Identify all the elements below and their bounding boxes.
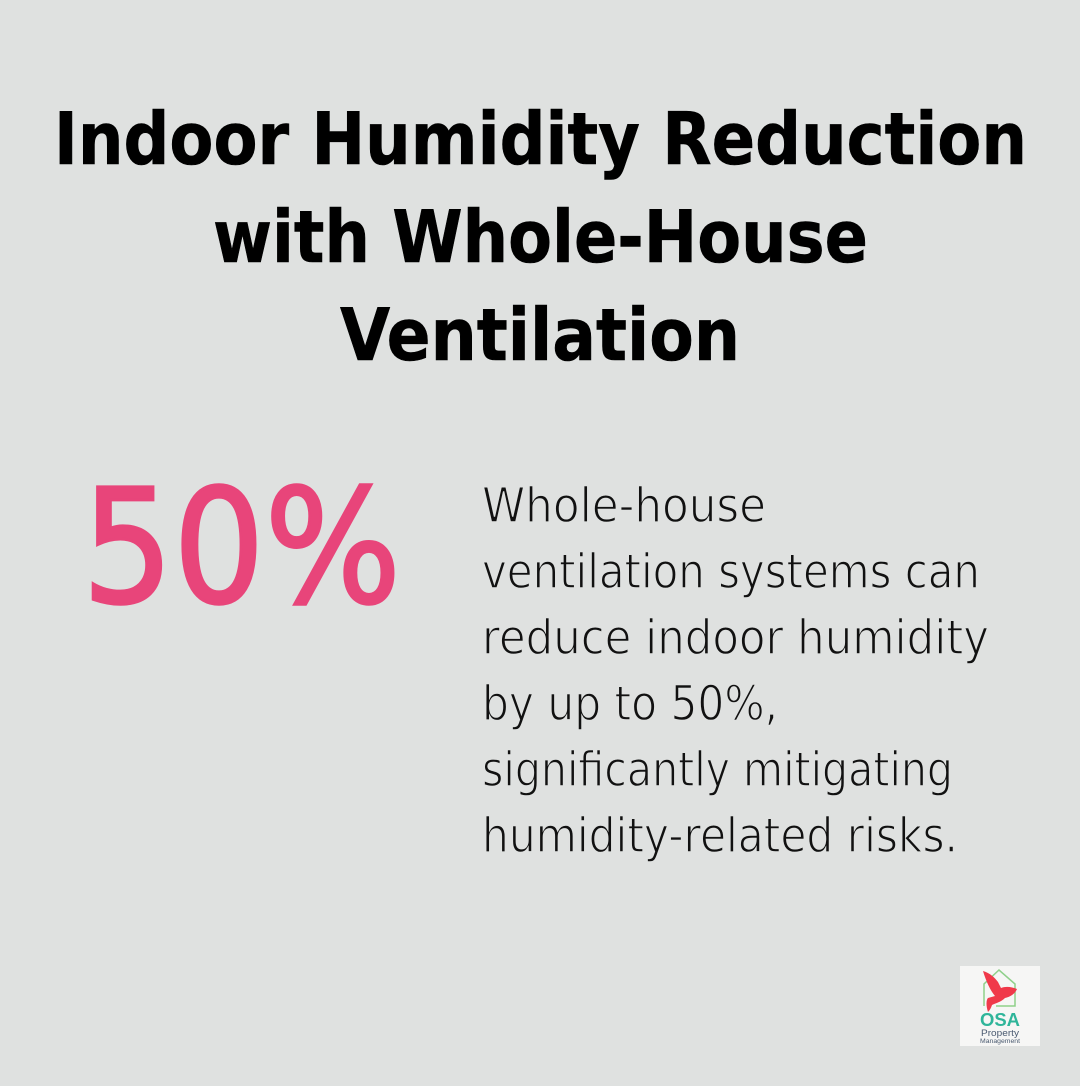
logo tagline: Property — [981, 1028, 1020, 1038]
icon: red bird — [983, 971, 1017, 1012]
description text — [482, 478, 989, 864]
description text: by up to 50%, — [482, 676, 778, 732]
icon: house outline — [984, 970, 1015, 1006]
title — [54, 97, 1027, 377]
logo tagline: Management — [980, 1038, 1020, 1045]
description text: reduce indoor humidity — [482, 610, 989, 666]
description text: ventilation systems can — [482, 544, 980, 600]
logo: OSA Property Management — [960, 966, 1040, 1046]
title: Ventilation — [340, 293, 740, 377]
description text: humidity-related risks. — [482, 808, 958, 864]
logo tagline — [980, 1028, 1020, 1045]
title: with Whole-House — [213, 195, 868, 279]
description text: Whole-house — [482, 478, 766, 534]
logo wordmark: OSA — [980, 1010, 1020, 1030]
description text: significantly mitigating — [482, 742, 953, 798]
logo background — [960, 966, 1040, 1046]
big stat: 50%: 50% — [82, 456, 401, 640]
